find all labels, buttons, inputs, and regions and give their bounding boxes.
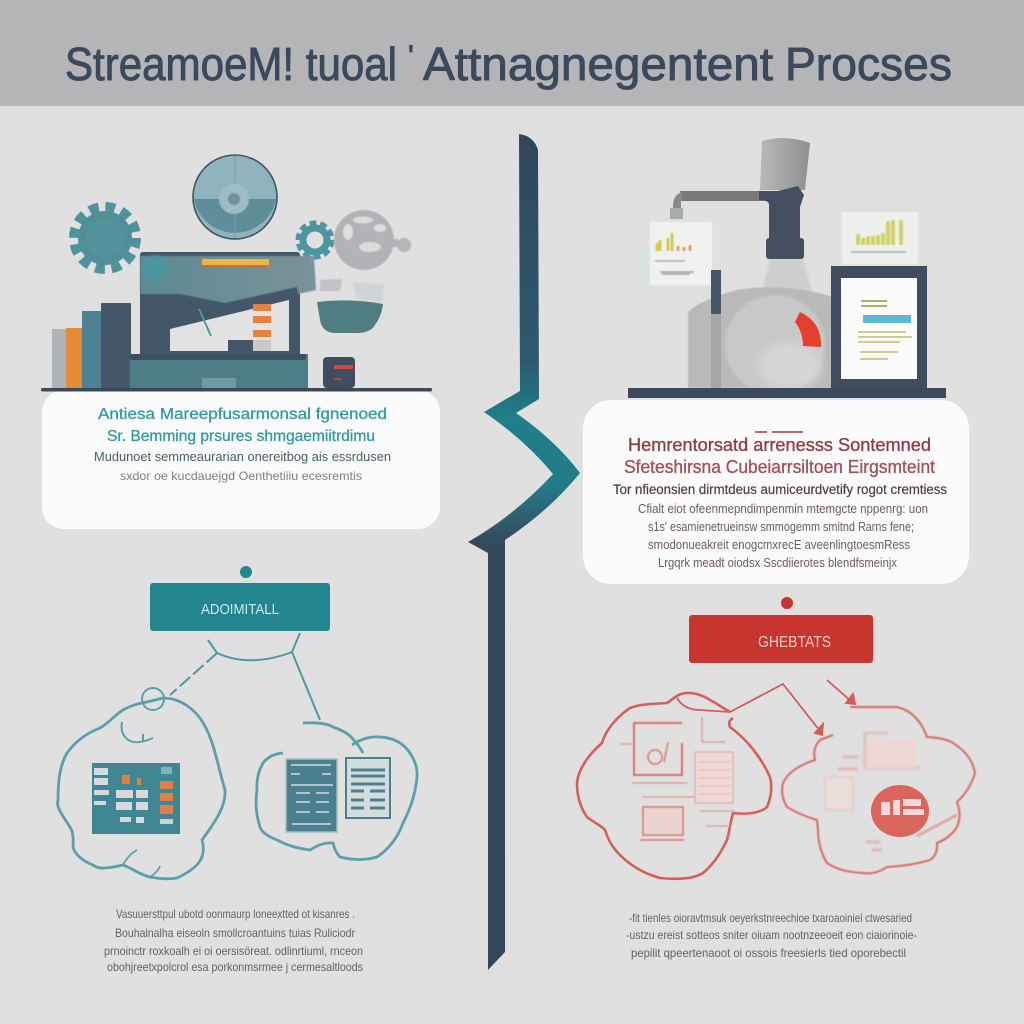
right chart panel — [842, 212, 918, 264]
right card body: Lrgqrk meadt oiodsx Sscdiierotes blendfsmeinjx — [658, 556, 898, 570]
left footer text: Bouhalnalha eiseoln smollcroantuins tuias Ruliciodr — [115, 926, 355, 940]
right card heading: Sfeteshirsna Cubeiarrsiltoen Eirgsmteint — [624, 457, 935, 477]
header band with title: ' — [408, 40, 414, 73]
right footer text: -fit tienles oioravtmsuk oeyerkstnreechioe txaroaoiniel ctwesaried — [629, 911, 912, 925]
header band with title — [0, 0, 1024, 106]
left card heading: Sr. Bemming prsures shmgaemiitrdimu — [107, 428, 375, 445]
red cloud left — [577, 693, 771, 879]
icon: red circle chart — [871, 785, 957, 837]
left footer text: Vasuuersttpul ubotd oonmaurp loneextted ot kisanres . — [116, 907, 355, 921]
right illustration: machine with tablet — [628, 138, 946, 398]
icon: small device — [323, 357, 355, 388]
icon: document two — [346, 758, 390, 818]
tablet — [831, 266, 927, 388]
teal cloud right — [256, 723, 417, 860]
icon: large gear — [76, 209, 134, 267]
right card body — [613, 482, 947, 570]
red button: GHEBTATS — [758, 634, 831, 651]
right shelf — [628, 388, 946, 398]
left shelf — [41, 388, 432, 392]
right card heading — [624, 435, 935, 477]
right footer text: -ustzu ereist sotteos sniter oiuam nootnzeeoeit eon ciaiorinoie- — [626, 928, 917, 942]
teal connector lines — [170, 633, 320, 720]
header band with title: Attnagnegentent — [423, 38, 773, 90]
left footer text: obohjreetxpolcrol esa porkonmsrmee j cermesaltloods — [107, 960, 363, 974]
left chart panel — [637, 222, 712, 285]
left card heading — [98, 406, 387, 445]
funnel and pipe — [670, 138, 810, 259]
left card body — [94, 449, 391, 483]
icon: grey gear globe — [334, 210, 411, 270]
left illustration: computer workstation — [52, 155, 411, 388]
central zigzag divider — [468, 134, 580, 970]
red button — [689, 597, 873, 663]
right footer text — [626, 911, 917, 960]
left footer text — [104, 907, 363, 974]
icon: faded documents — [825, 733, 920, 850]
icon: document one — [286, 759, 337, 832]
icon: bowl — [317, 279, 384, 333]
header band with title: Procses — [785, 38, 952, 90]
laptop — [130, 252, 316, 388]
teal button: ADOIMITALL — [201, 601, 279, 618]
right card body: smodonueakreit enogcmxrecE aveenlingtoesmRess — [648, 538, 910, 552]
left card body: sxdor oe kucdauejgd Oenthetiiiu ecesremtis — [120, 469, 362, 483]
right card body: s1s' esamienetrueinsw smmogemm smitnd Rarns fene; — [648, 520, 914, 534]
red cloud right — [782, 707, 975, 873]
right card body: Tor nfieonsien dirmtdeus aumiceurdvetify rogot cremtiess — [613, 482, 947, 497]
right card heading: Hemrentorsatd arrenesss Sontemned — [628, 435, 931, 455]
left card heading: Antiesa Mareepfusarmonsal fgnenoed — [98, 406, 387, 423]
right card body: Cfialt eiot ofeenmepndimpenmin mtemgcte nppenrg: uon — [638, 502, 928, 516]
red arrows — [730, 680, 855, 735]
icon: dashboard tablet — [92, 763, 180, 834]
icon: disc — [193, 155, 277, 239]
icon: stacked books — [52, 303, 131, 388]
header band with title: StreamoeM! tuoal — [65, 38, 397, 90]
icon: red document group — [620, 717, 735, 840]
right card — [583, 400, 969, 584]
icon: small gear — [300, 225, 330, 255]
machine body — [688, 259, 833, 395]
left card body: Mudunoet semmeaurarian onereitbog ais essrdusen — [94, 449, 391, 464]
right footer text: pepilit qpeertenaoot oi ossois freesierls tied oporebectil — [631, 946, 906, 960]
teal button — [150, 566, 330, 631]
teal cloud left — [58, 688, 225, 879]
left footer text: prnoinctr roxkoalh ei oi oersisöreat. odlinrtiuml, rnceon — [104, 944, 363, 958]
left card — [41, 388, 440, 529]
